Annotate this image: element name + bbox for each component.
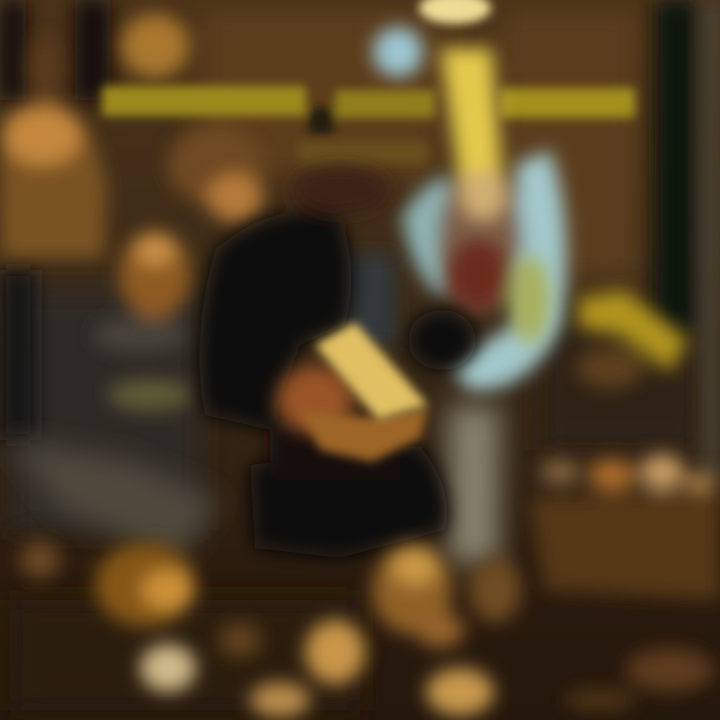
figure in black [199, 166, 476, 558]
dark column right [655, 0, 720, 480]
basket right [530, 454, 720, 600]
grey left table [10, 440, 220, 560]
lamp [419, 0, 491, 24]
flask glass [402, 150, 566, 392]
yellow ribbon [576, 290, 688, 388]
dark grey haze beside figure [345, 255, 395, 345]
lower bottle [92, 231, 192, 411]
blue circle [373, 27, 423, 77]
flask liquid [448, 239, 550, 344]
gold nuggets pile [20, 542, 714, 718]
upper bottle [121, 14, 263, 222]
title band [102, 86, 635, 164]
pale column [448, 405, 500, 565]
gold bar and hand [277, 322, 428, 462]
dark top-left posts [0, 0, 110, 440]
pouring gold stream [440, 48, 507, 221]
bell-shaped bottle left [0, 34, 106, 258]
